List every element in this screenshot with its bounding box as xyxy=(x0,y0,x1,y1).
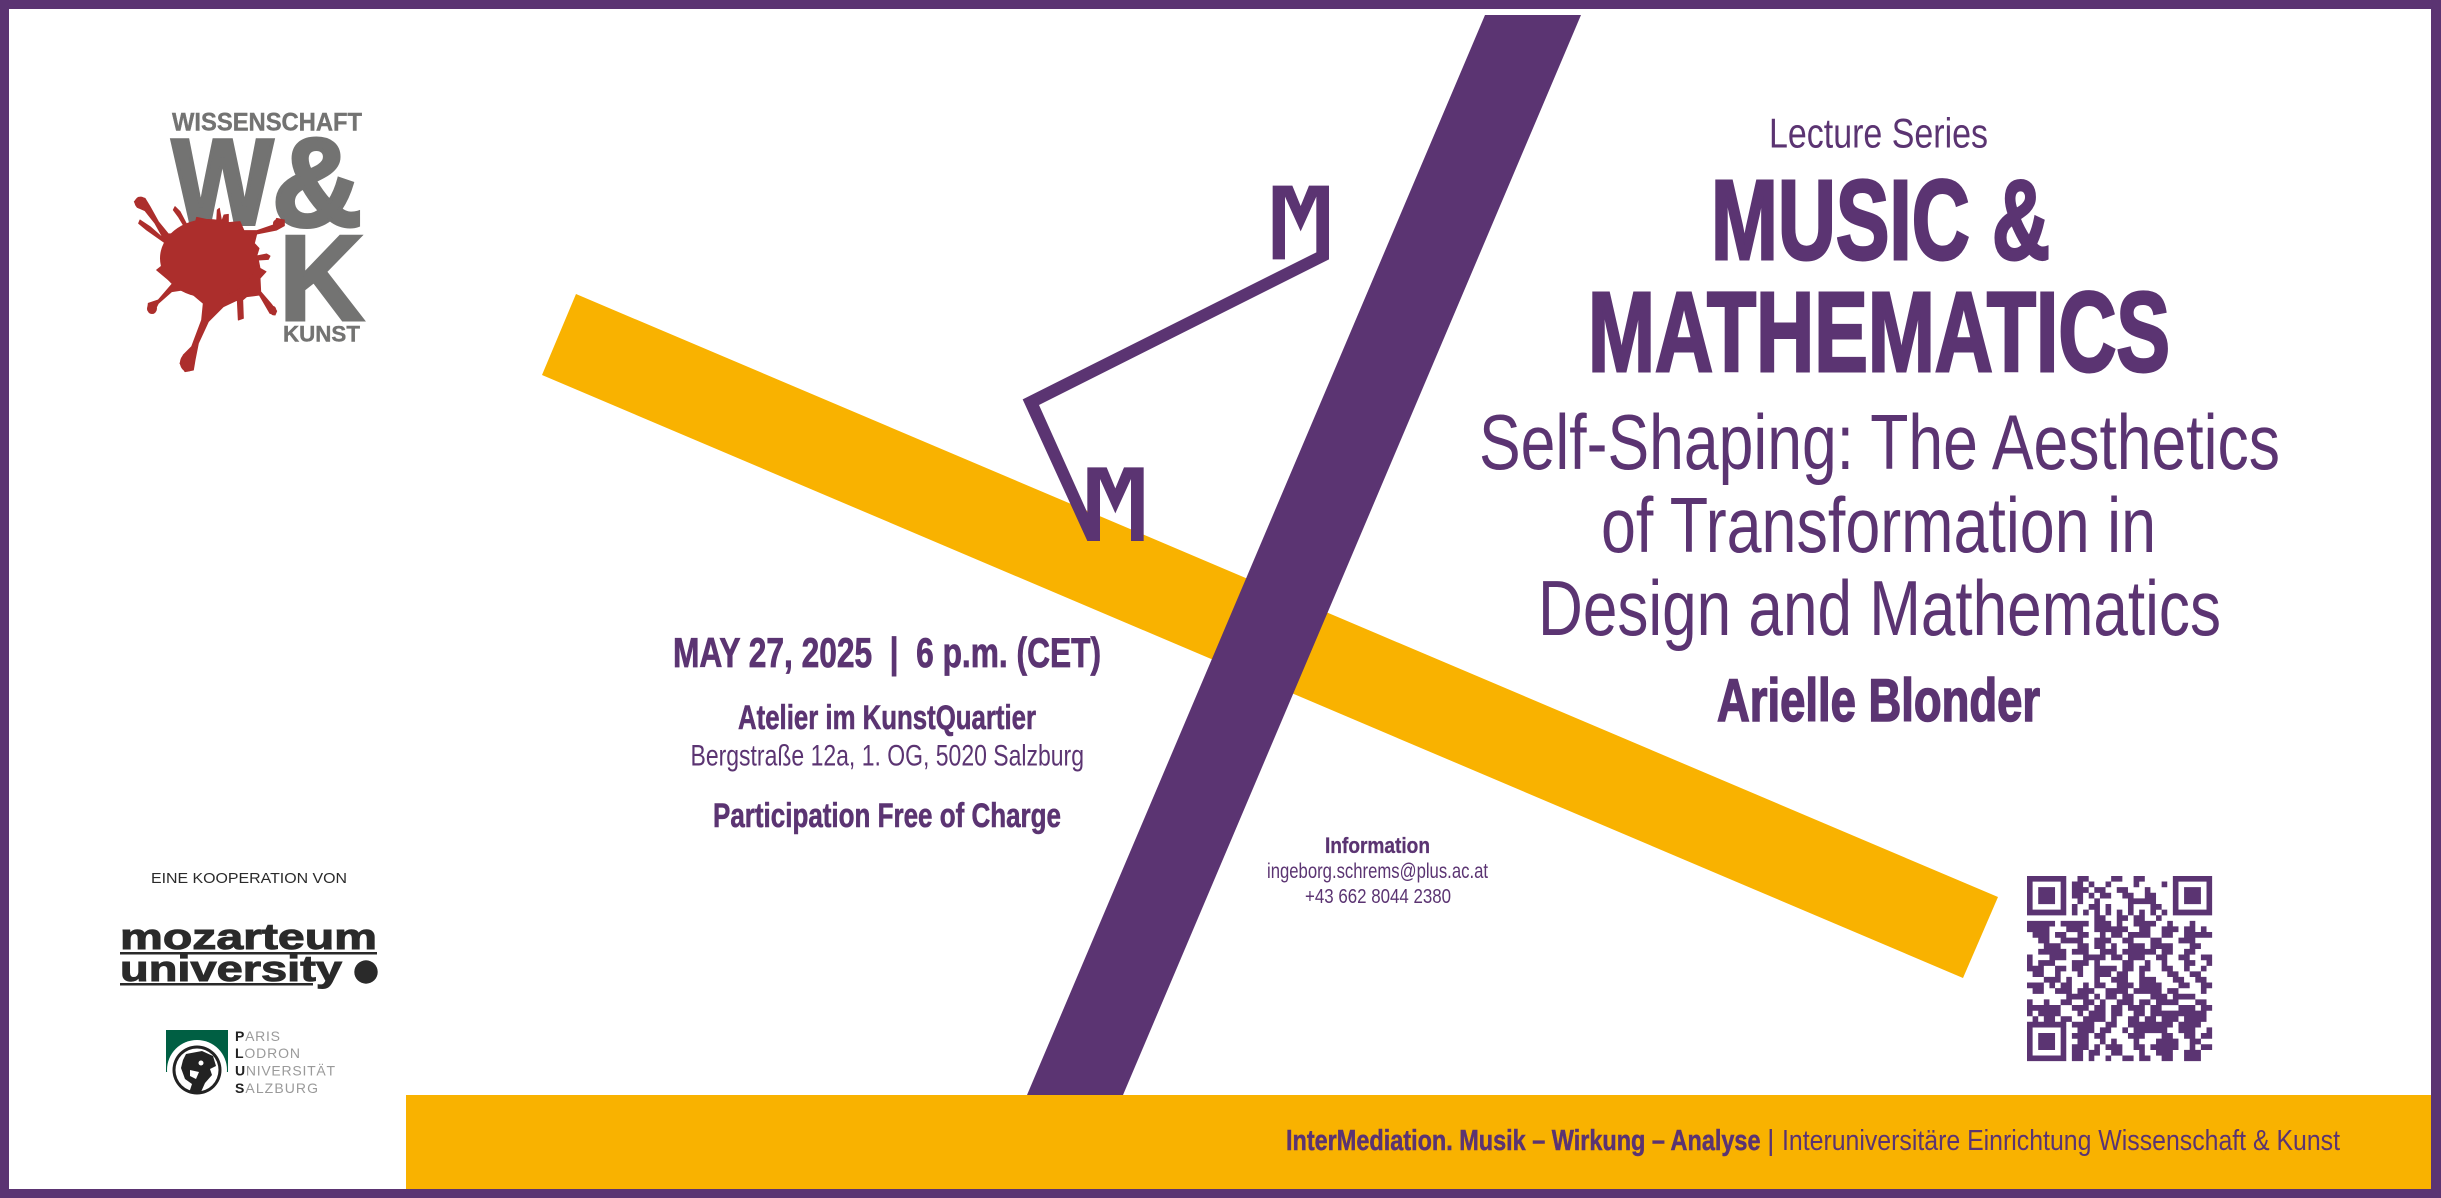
logo: Wissenschaft und Kunst: K xyxy=(279,210,364,346)
text: contact information: Information xyxy=(1325,833,1430,858)
subtitle: lecture topic: of Transformation in xyxy=(1601,481,2156,569)
logo: mozarteum university: mozarteum xyxy=(120,916,377,957)
logo: mozarteum university xyxy=(120,916,378,989)
logo: Wissenschaft und Kunst xyxy=(134,108,364,372)
QR code xyxy=(2027,879,2212,1058)
text: contact information: +43 662 8044 2380 xyxy=(1305,886,1451,908)
logo: Paris Lodron Universität Salzburg xyxy=(166,1028,335,1100)
title: music and mathematics: MUSIC & xyxy=(1711,157,2050,283)
yellow diagonal bar xyxy=(542,294,1998,978)
text: footer line in yellow band: | xyxy=(1767,1125,1775,1157)
bottom yellow band xyxy=(406,1095,2431,1189)
logo: Paris Lodron Universität Salzburg: SALZBURG xyxy=(235,1080,318,1096)
logo: Wissenschaft und Kunst: KUNST xyxy=(283,322,361,346)
text: contact information: ingeborg.schrems@plus.ac.at xyxy=(1267,860,1488,883)
text: event date and venue: Participation Free of Charge xyxy=(713,797,1061,835)
text: contact information xyxy=(1267,833,1488,908)
logo: mozarteum university: university xyxy=(120,948,342,989)
logo: Paris Lodron Universität Salzburg: UNIVERSITÄT xyxy=(235,1063,335,1079)
logo: Wissenschaft und Kunst: & xyxy=(272,112,362,253)
text: cooperation label: EINE KOOPERATION VON xyxy=(151,870,347,887)
logo: Paris Lodron Universität Salzburg: PARIS xyxy=(235,1028,280,1044)
logo: Wissenschaft und Kunst: WISSENSCHAFT xyxy=(172,108,362,136)
heading: lecture series: Lecture Series xyxy=(1769,110,1988,156)
subtitle: lecture topic xyxy=(1479,398,2280,652)
text: event date and venue: Bergstraße 12a, 1. OG, 5020 Salzburg xyxy=(690,740,1084,772)
subtitle: lecture topic: Design and Mathematics xyxy=(1538,564,2221,652)
purple diagonal bar xyxy=(1027,15,1581,1095)
text: event date and venue: MAY 27, 2025 | 6 p.m. (CET) xyxy=(673,629,1101,677)
text: footer line in yellow band: Interuniversitäre Einrichtung Wissenschaft & Kunst xyxy=(1782,1125,2340,1157)
title: music and mathematics xyxy=(1588,157,2170,395)
text: event date and venue: Atelier im KunstQuartier xyxy=(738,699,1036,737)
logo: Wissenschaft und Kunst: W xyxy=(172,114,274,250)
text: speaker name: Arielle Blonder xyxy=(1717,667,2040,734)
text: footer line in yellow band xyxy=(1286,1125,2340,1157)
logo: Paris Lodron Universität Salzburg: LODRON xyxy=(235,1045,300,1061)
text: event date and venue xyxy=(673,629,1101,835)
text: footer line in yellow band: InterMediation. Musik – Wirkung – Analyse xyxy=(1286,1125,1760,1157)
icon: connected M M logo mark xyxy=(1023,186,1329,541)
title: music and mathematics: MATHEMATICS xyxy=(1588,269,2170,395)
